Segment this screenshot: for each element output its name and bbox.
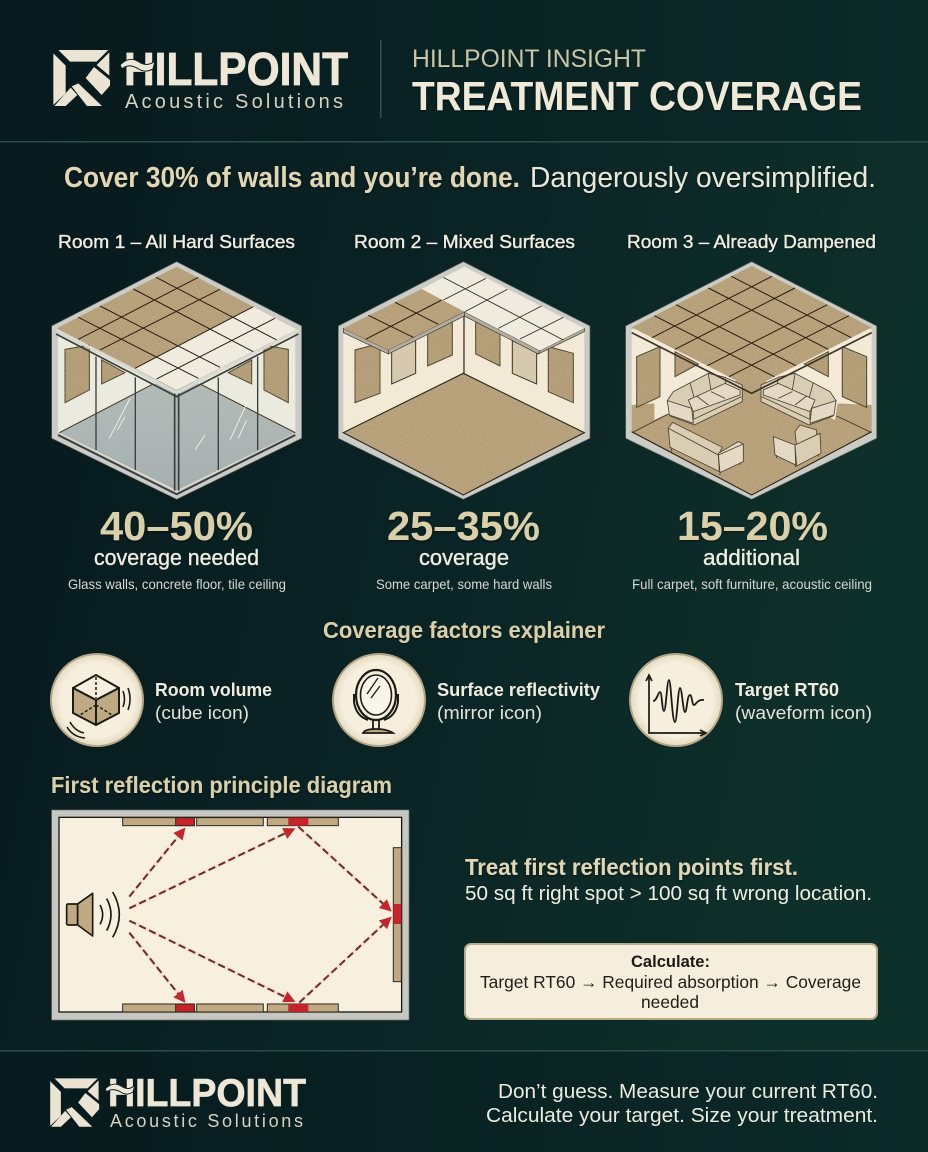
callout: calculate: needed	[641, 992, 699, 1012]
armchair	[773, 425, 821, 467]
stat: 25–35%	[387, 503, 540, 549]
wall panels	[123, 818, 401, 1012]
stat label: additional	[703, 545, 800, 570]
logo tagline: Acoustic Solutions	[125, 91, 343, 113]
panel: room 1	[52, 231, 302, 592]
heading: first reflection: First reflection principle diagram	[51, 772, 392, 798]
room 1 title: Room 1 – All Hard Surfaces	[58, 231, 295, 252]
headline: Dangerously oversimplified.	[530, 162, 876, 194]
illustration: mixed room	[338, 262, 590, 499]
headline: Cover 30% of walls and you’re done.	[64, 162, 520, 194]
header band	[0, 0, 928, 141]
footer band	[0, 1050, 928, 1152]
panel: room 2	[338, 231, 590, 592]
note: (cube icon)	[155, 703, 249, 723]
footer call to action	[486, 1081, 878, 1127]
illustration: dampened room	[626, 262, 877, 499]
label: Target RT60	[735, 680, 839, 700]
callout: first reflection: 50 sq ft right spot > 100 sq ft wrong location.	[465, 883, 872, 905]
icon: mirror	[333, 654, 425, 746]
description: Glass walls, concrete floor, tile ceiling	[68, 576, 286, 592]
header title block	[412, 45, 862, 119]
stat: 40–50%	[100, 503, 253, 549]
label: Room volume	[155, 680, 272, 700]
description: Some carpet, some hard walls	[376, 576, 552, 592]
icon: logo mark	[53, 50, 110, 106]
title: TREATMENT COVERAGE	[412, 73, 862, 119]
logo wordmark: HILLPOINT	[124, 43, 348, 95]
icon: logo mark	[50, 1078, 99, 1127]
illustration: glass room	[52, 262, 302, 499]
callout: calculate: Target RT60 → Required absorption → Coverage	[480, 972, 861, 992]
stat: 15–20%	[677, 503, 828, 549]
stat label: coverage needed	[94, 545, 259, 570]
factor: target RT60	[630, 654, 872, 746]
note: (waveform icon)	[735, 703, 872, 723]
room 3 title: Room 3 – Already Dampened	[627, 231, 876, 252]
headline	[64, 162, 876, 194]
sofa: front left	[668, 422, 743, 475]
header logo: Hillpoint	[53, 43, 348, 113]
callout: calculate	[465, 944, 877, 1019]
label: Surface reflectivity	[437, 680, 600, 700]
logo tagline: Acoustic Solutions	[110, 1111, 303, 1131]
footer call to action: Don’t guess. Measure your current RT60.	[498, 1081, 878, 1103]
description: Full carpet, soft furniture, acoustic ceiling	[632, 576, 872, 592]
icon: waveform	[630, 654, 722, 746]
factor: room volume	[51, 654, 272, 746]
callout: first reflection: Treat first reflection points first.	[465, 854, 798, 880]
callout: calculate: Calculate:	[631, 953, 710, 971]
footer call to action: Calculate your target. Size your treatment.	[486, 1105, 878, 1127]
sofa: back right	[761, 373, 836, 425]
footer logo: Hillpoint	[50, 1072, 306, 1131]
arrows	[129, 827, 390, 1003]
panel: room 3	[626, 231, 877, 592]
sofas	[667, 373, 836, 475]
diagram: first reflection	[52, 810, 409, 1020]
callout: first reflection	[465, 854, 872, 905]
eyebrow: HILLPOINT INSIGHT	[412, 45, 646, 73]
icon: cube	[51, 654, 143, 746]
heading: coverage factors: Coverage factors explainer	[323, 617, 605, 643]
logo wordmark: HILLPOINT	[108, 1072, 306, 1115]
stat label: coverage	[419, 545, 509, 570]
sofa: back left	[667, 373, 742, 425]
note: (mirror icon)	[437, 703, 542, 723]
room 2 title: Room 2 – Mixed Surfaces	[354, 231, 575, 252]
factor: surface reflectivity	[333, 654, 600, 746]
icon: speaker	[67, 892, 119, 937]
